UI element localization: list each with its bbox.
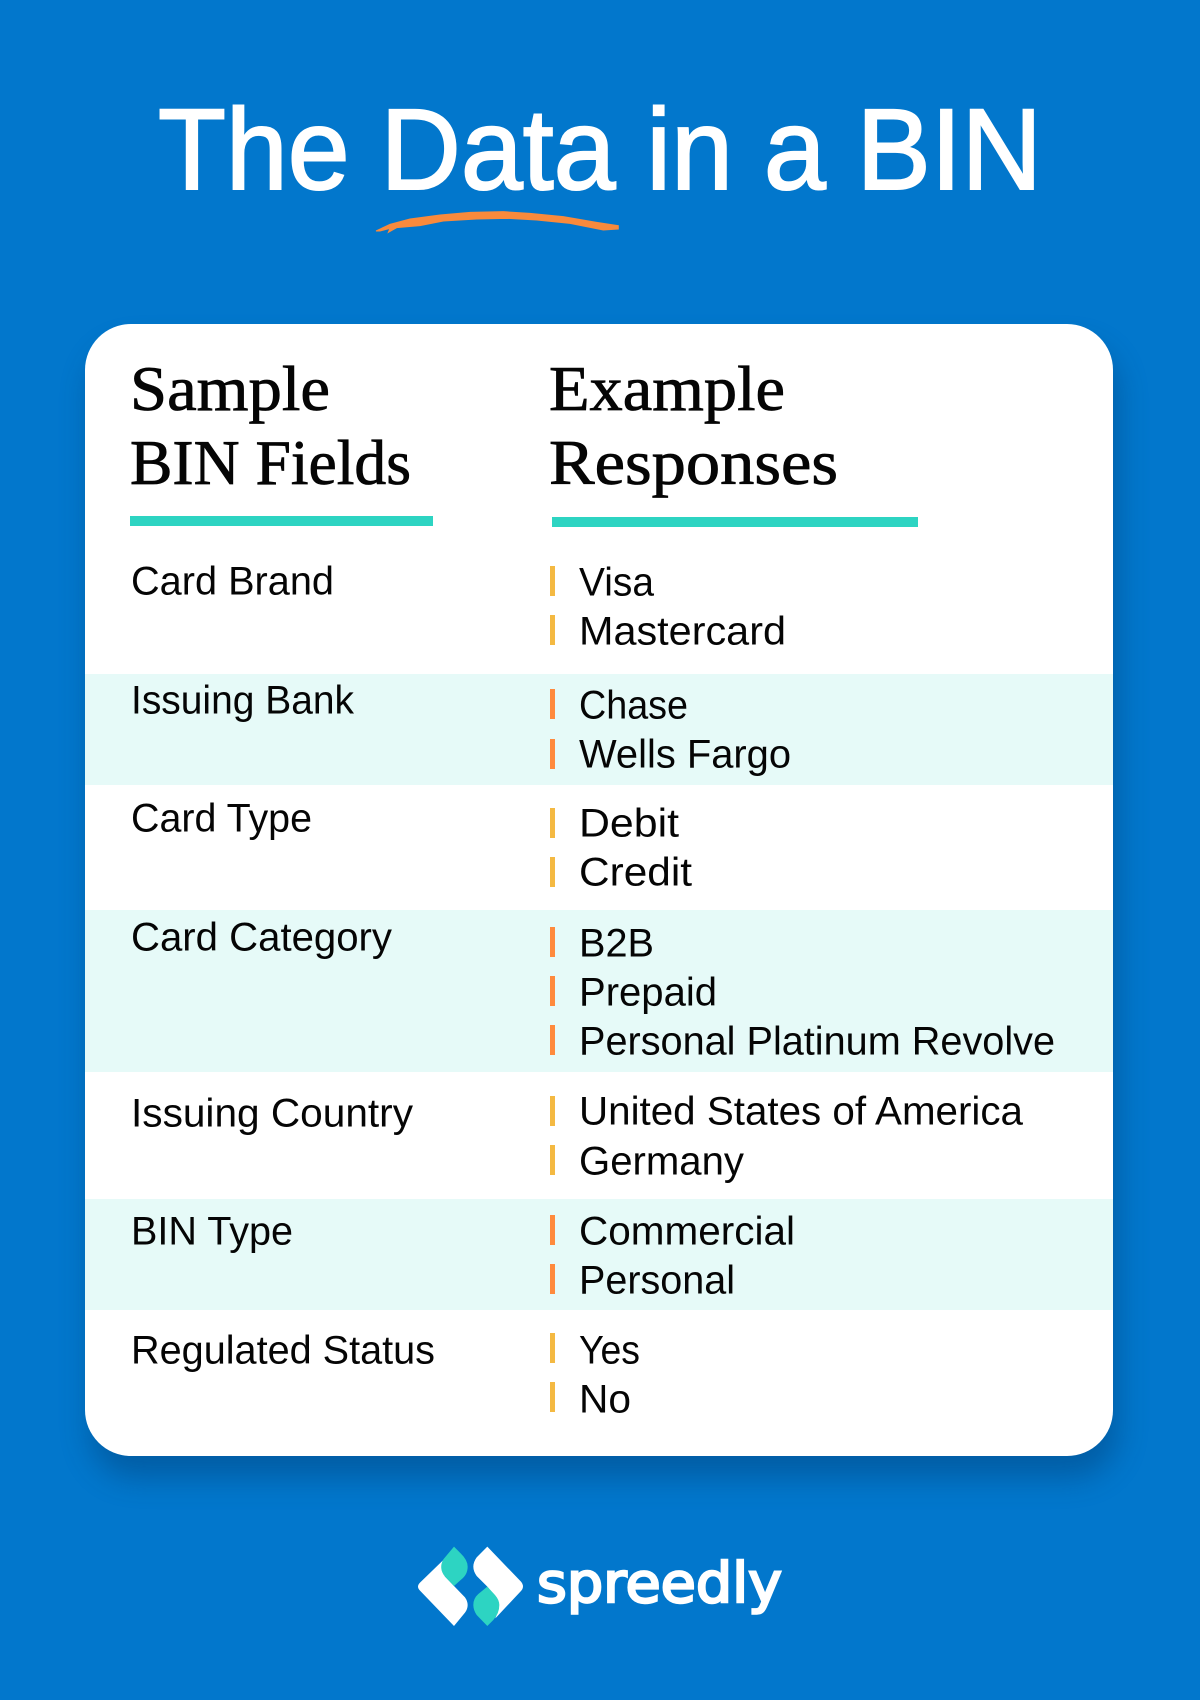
response bullet bars (550, 566, 555, 1412)
logo wordmark: spreedly (537, 1551, 782, 1615)
field names column: BIN Type (131, 1210, 293, 1254)
example responses column: No (579, 1378, 631, 1422)
example responses column: Prepaid (579, 970, 717, 1014)
example responses column: Germany (579, 1140, 744, 1184)
field names column: Issuing Country (131, 1092, 413, 1136)
heading rule right (552, 517, 918, 527)
heading: example responses: Example (549, 353, 785, 424)
field names column: Card Category (131, 916, 392, 960)
example responses column: Wells Fargo (579, 732, 791, 776)
example responses column: Yes (579, 1328, 640, 1372)
example responses column (579, 560, 1055, 1422)
example responses column: B2B (579, 922, 654, 966)
example responses column: Personal (579, 1258, 735, 1302)
card shadow (90, 346, 1118, 1478)
title underline brush stroke (376, 212, 618, 232)
heading: sample BIN fields: Sample (130, 353, 330, 424)
example responses column: Personal Platinum Revolve (579, 1020, 1055, 1064)
example responses column: Credit (579, 850, 692, 894)
example responses column: Chase (579, 684, 688, 728)
panel: BIN fields table (85, 324, 1113, 1456)
example responses column: Debit (579, 802, 679, 846)
icon: Spreedly logo mark (418, 1547, 523, 1626)
field names column (131, 560, 435, 1372)
example responses column: Visa (579, 560, 655, 604)
example responses column: Commercial (579, 1210, 795, 1254)
field names column: Regulated Status (131, 1328, 435, 1372)
title: The Data in a BIN (158, 86, 1042, 214)
field names column: Card Brand (131, 560, 334, 604)
field names column: Issuing Bank (131, 678, 355, 722)
heading rule left (130, 516, 433, 526)
field names column: Card Type (131, 796, 312, 840)
heading: sample BIN fields (130, 353, 411, 498)
example responses column: United States of America (579, 1090, 1024, 1134)
heading: sample BIN fields: BIN Fields (130, 427, 411, 498)
example responses column: Mastercard (579, 610, 786, 654)
heading: example responses: Responses (549, 427, 838, 498)
shaded row bands (85, 674, 1113, 1310)
heading: example responses (549, 353, 838, 498)
